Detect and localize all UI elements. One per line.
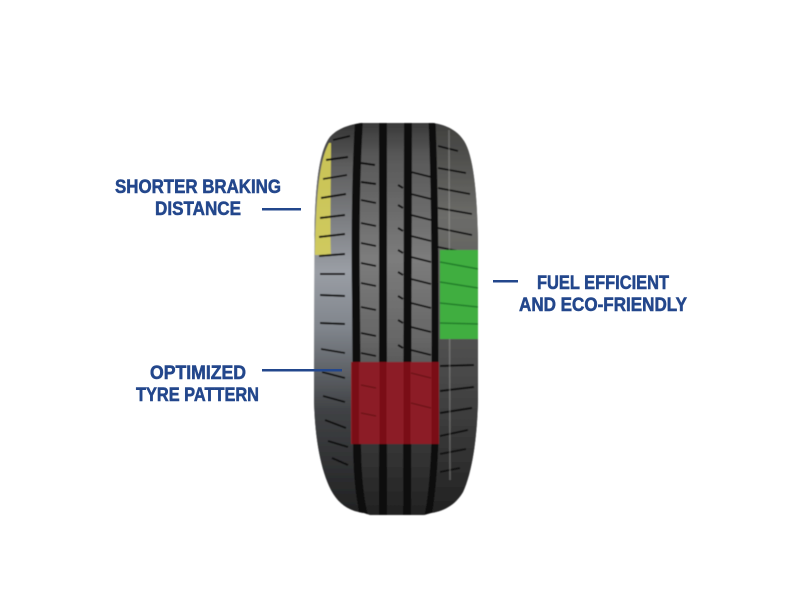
label: fuel efficient: AND ECO-FRIENDLY xyxy=(519,295,687,316)
label: shorter braking distance: SHORTER BRAKING xyxy=(115,177,281,198)
label: optimized tyre pattern xyxy=(136,363,259,406)
leader line: fuel xyxy=(493,280,518,282)
label: optimized tyre pattern: OPTIMIZED xyxy=(150,363,246,384)
leader line: pattern xyxy=(262,369,342,372)
tyre xyxy=(313,122,479,516)
right shoulder rib line xyxy=(449,130,450,480)
shoulder and rib sipes xyxy=(319,136,474,472)
label: optimized tyre pattern: TYRE PATTERN xyxy=(136,385,259,406)
yellow highlight: braking zone xyxy=(315,143,331,255)
label: fuel efficient xyxy=(519,273,687,316)
label: shorter braking distance xyxy=(115,177,281,220)
leader line: braking xyxy=(262,208,301,210)
red highlight: tyre pattern zone xyxy=(351,362,439,444)
longitudinal grooves xyxy=(356,120,435,516)
green highlight: fuel efficient zone xyxy=(440,250,479,339)
left shoulder xyxy=(314,124,356,512)
label: shorter braking distance: DISTANCE xyxy=(155,199,241,220)
label: fuel efficient: FUEL EFFICIENT xyxy=(537,273,669,294)
right shoulder xyxy=(432,123,478,513)
